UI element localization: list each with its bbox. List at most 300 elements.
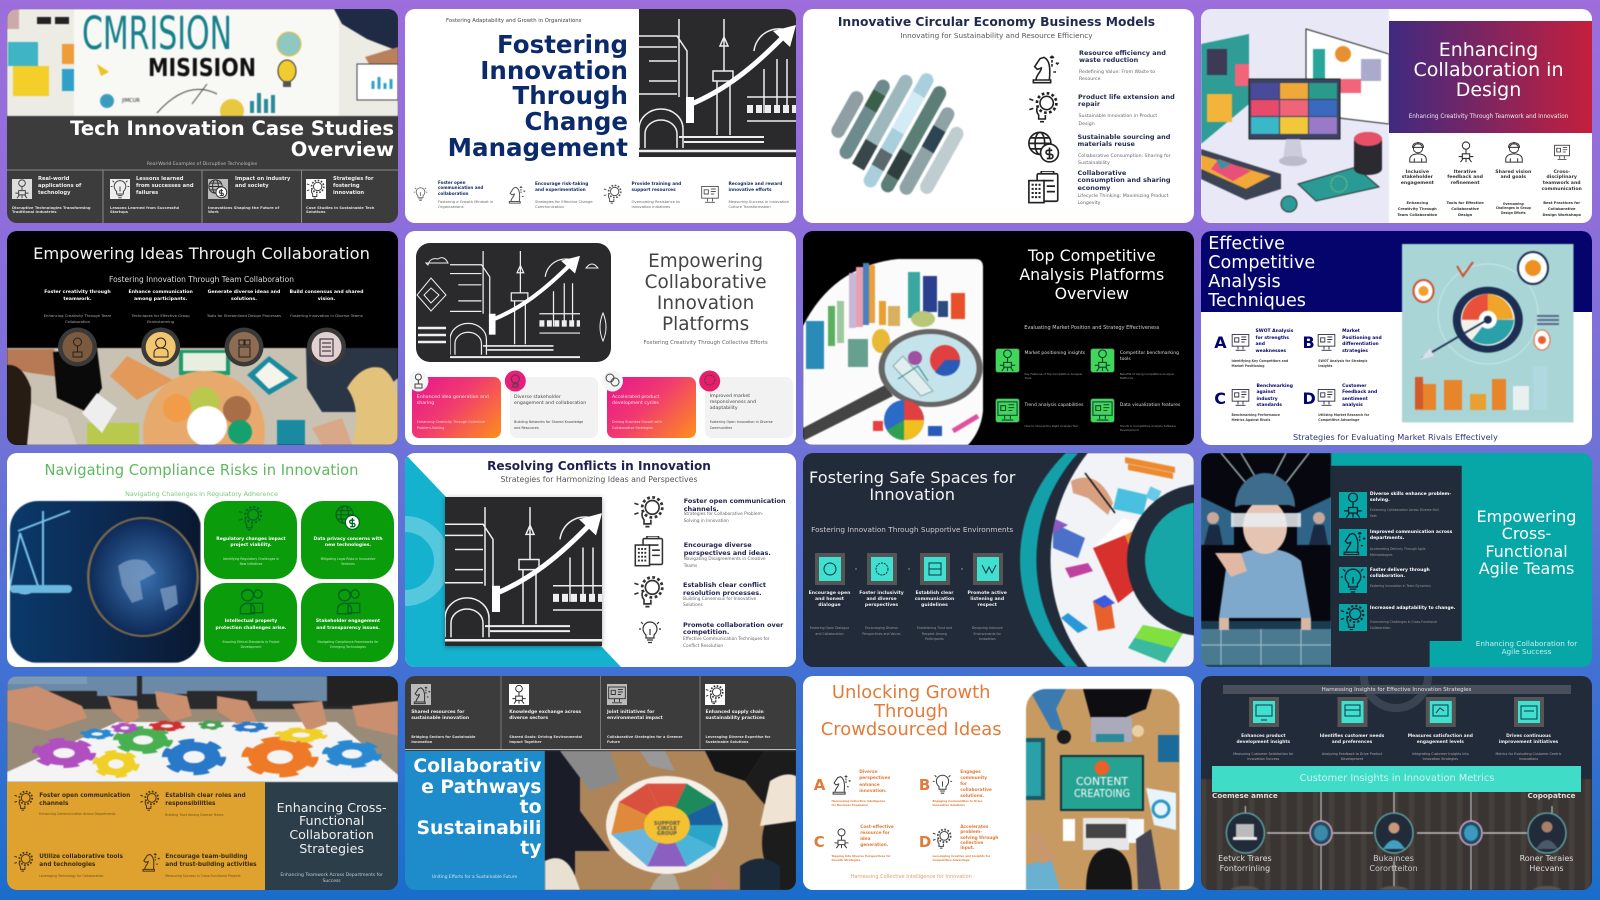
- title: Fostering Safe Spaces for: [809, 468, 1015, 487]
- item 2 note: Strategies for Effective Change: [535, 200, 593, 204]
- item 4 heading: fostering: [333, 182, 360, 188]
- subtitle: [280, 873, 383, 884]
- item 1: dialogue: [818, 603, 841, 608]
- item 1 heading: Inclusive: [1406, 170, 1429, 174]
- card C text: Accelerated product: [612, 394, 659, 400]
- item 2 note: [509, 734, 582, 744]
- item 4 text: [290, 290, 363, 303]
- item 4 note: Best Practices for: [1543, 201, 1580, 205]
- icon 2: [139, 790, 161, 811]
- subtitle: Navigating Challenges in Regulatory Adherence: [125, 490, 278, 498]
- item 2 heading: [1078, 92, 1175, 108]
- item A: innovation.: [859, 789, 887, 794]
- item 1: Diverse skills enhance problem-: [1370, 492, 1451, 497]
- image: line art with arrow: [639, 8, 796, 156]
- photo: support circle group: GROUP: [657, 831, 677, 837]
- item 4: Promote active: [968, 590, 1007, 596]
- item 3 note: Establishing Trust and: [917, 626, 952, 630]
- item 3 text: [208, 290, 280, 303]
- icon 2: [1090, 348, 1115, 373]
- item 2 heading: and experimentation: [535, 188, 586, 192]
- item 1 note: Solving in Innovation: [684, 519, 729, 524]
- item 1: Shared resources for: [411, 710, 464, 715]
- icon 3: [607, 684, 627, 705]
- node label right: Roner Teraies: [1520, 854, 1573, 863]
- item 3 note: [208, 206, 280, 214]
- title: Crowdsourced Ideas: [821, 719, 1002, 740]
- card 2 note: [321, 557, 375, 567]
- item 1 note: Strategies for Collaborative Problem-: [684, 512, 763, 517]
- photo: support circle group: CIRCLE: [657, 826, 677, 832]
- item 4: respect: [977, 603, 997, 608]
- title panel: [1388, 20, 1592, 132]
- item 2 note: [684, 556, 766, 571]
- item A note: Market Positioning: [1232, 364, 1264, 368]
- icon: bulb: [638, 616, 662, 648]
- item 2 heading: Product life extension and: [1078, 92, 1175, 100]
- panel: Top Competitive Analysis Platforms Overview: [802, 231, 1194, 445]
- item C text: standards: [1256, 403, 1282, 408]
- item 2 note: Lessons Learned from Successful: [110, 206, 179, 210]
- node label centre: Bukaınces: [1373, 854, 1414, 863]
- title: Through: [874, 701, 948, 722]
- item 2 note: Collaborative: [1451, 207, 1479, 211]
- item 1 note: Resource: [1079, 77, 1100, 82]
- card C text: [612, 394, 659, 408]
- item A: enhance: [859, 783, 880, 788]
- item 4 note: Innovation: [979, 637, 996, 641]
- item 1 note: [44, 313, 111, 324]
- item 3: guidelines: [921, 603, 948, 608]
- item 3: [607, 710, 663, 722]
- title: Design: [1456, 79, 1521, 101]
- item 4 note: Designing Inclusive: [972, 626, 1003, 630]
- panel: Empowering Ideas Through Collaboration: [7, 231, 398, 445]
- item 2: [1370, 530, 1452, 542]
- title: [809, 469, 1015, 503]
- item 1 heading: waste reduction: [1079, 56, 1138, 64]
- item 3: Establish clear: [916, 590, 954, 596]
- item 4 note: Innovations: [1519, 757, 1538, 761]
- item 3 note: Work: [208, 210, 219, 214]
- card B note: and Resources: [514, 426, 539, 430]
- item 2 heading: Encourage risk-taking: [535, 182, 588, 186]
- item 2 text: [128, 290, 193, 303]
- icon: globe and coin: [1028, 132, 1060, 163]
- card: stakeholder: [301, 583, 394, 662]
- item 4 heading: economy: [1078, 184, 1110, 192]
- item 3: communication: [915, 597, 954, 602]
- panel: Unlocking Growth Through Crowdsourced Ideas: [802, 676, 1194, 890]
- card 1 text: project viability.: [230, 543, 272, 548]
- item 2 heading: refinement: [1451, 181, 1480, 186]
- card C: [607, 377, 696, 438]
- item 4 note: Development: [1120, 428, 1139, 432]
- item 1 note: [411, 734, 475, 744]
- item 2 note: [1446, 201, 1484, 218]
- item 2 heading: [535, 182, 588, 192]
- node label left: [1218, 854, 1272, 874]
- item 4 note: [728, 200, 789, 209]
- blue title panel: [405, 751, 545, 890]
- item A note: Identifying Key Competitors and: [1232, 359, 1288, 363]
- item A note: Harnessing Collective Intelligence: [832, 799, 885, 803]
- item 1 heading: applications of: [38, 182, 81, 188]
- item 2: [509, 710, 581, 722]
- card 3 text: protection challenges arise.: [216, 626, 286, 630]
- item 1: sustainable innovation: [411, 716, 469, 721]
- subtitle: Fostering Adaptability and Growth in Organizations: [446, 18, 581, 24]
- subtitle: [1476, 640, 1577, 657]
- title: to: [520, 797, 542, 818]
- item 3: Establish clear conflict: [683, 581, 766, 589]
- item C: idea: [860, 837, 871, 842]
- item 2 heading: Iterative: [1454, 170, 1476, 174]
- icon 2: [1338, 529, 1366, 556]
- item 1 note: Measuring Customer Satisfaction for: [1233, 752, 1293, 756]
- card 4 text: [316, 619, 380, 632]
- band: [1212, 766, 1581, 792]
- icon: strategies: [306, 178, 326, 198]
- title: Collaboration: [289, 827, 374, 842]
- item 4 note: Collaborative: [1548, 207, 1576, 211]
- letter D: D: [1302, 389, 1316, 408]
- node label top left: Coemese amnce: [1212, 791, 1278, 800]
- icon: chess: [1032, 55, 1060, 84]
- item 2 note: Shared Goals: Driving Environmental: [509, 734, 582, 738]
- item 4: [706, 710, 765, 722]
- letter C: C: [1214, 389, 1226, 408]
- card 3 note: [222, 640, 280, 650]
- item 2 note: Accelerating Delivery Through Agile: [1370, 546, 1426, 550]
- item 2 note: Sustainable Innovation in Product: [1078, 114, 1157, 119]
- item 2 note: Communication: [535, 205, 564, 209]
- item 1 note: Fostering Open Dialogue: [810, 626, 849, 630]
- item 3 text: solutions.: [231, 297, 257, 302]
- item 4 note: [1078, 194, 1169, 206]
- item A note: for Business Expansion: [832, 803, 868, 807]
- item 2 note: Navigating Disagreements in Creative: [684, 557, 766, 562]
- item 3 note: Collaborative Strategies for a Greener: [607, 734, 683, 738]
- image: target with arrow: [1402, 244, 1574, 423]
- item A note: [832, 799, 885, 807]
- item 3 heading: Impact on industry: [235, 176, 290, 182]
- node label top right: Copopatnce: [1528, 791, 1575, 800]
- item 4: Encourage team-building: [165, 854, 248, 860]
- item 4 note: Case Studies in Sustainable Tech: [306, 206, 374, 210]
- item 1 note: Bridging Sectors for Sustainable: [411, 734, 475, 738]
- icon 3: [995, 398, 1020, 423]
- item 4 heading: innovation: [333, 190, 364, 196]
- card 2 text: Data privacy concerns with: [313, 537, 383, 542]
- icon: gear bulb: [1029, 92, 1058, 122]
- item 2 note: Perspectives and Voices: [862, 632, 901, 636]
- card A text: Enhanced idea generation and: [417, 394, 489, 400]
- card C text: development cycles: [612, 401, 659, 406]
- item 4 heading: consumption and sharing: [1078, 176, 1171, 184]
- item B: solutions.: [960, 794, 984, 799]
- item D text: sentiment: [1342, 396, 1368, 402]
- icon: tower: [1454, 140, 1476, 164]
- item 3: environmental impact: [607, 716, 663, 721]
- title: [1477, 508, 1576, 577]
- item 2 heading: feedback and: [1447, 175, 1483, 180]
- node label left: Fontorrinling: [1220, 864, 1270, 873]
- item 3 note: Challenges in Group: [1496, 206, 1531, 210]
- band label: Customer Insights in Innovation Metrics: [1300, 773, 1494, 784]
- title: Unlocking Growth: [832, 682, 991, 703]
- title: Empowering: [1477, 507, 1576, 526]
- item 4 note: Sustainable Solutions: [706, 740, 748, 744]
- item C note: Metrics Against Rivals: [1232, 418, 1270, 422]
- item 3: and technologies: [39, 862, 95, 868]
- item 1: [411, 710, 469, 722]
- item 4: listening and: [970, 597, 1004, 602]
- icon: gear: [604, 184, 622, 204]
- item 4: Increased adaptability to change.: [1370, 606, 1455, 611]
- item 2 note: Encouraging Diverse: [865, 626, 898, 630]
- item 1 note: [1024, 372, 1082, 380]
- item 3 heading: Sustainable sourcing and: [1078, 132, 1170, 140]
- card 2 note: Ventures: [341, 562, 355, 566]
- item 2 note: Brainstorming: [147, 319, 174, 324]
- item 1 note: Enhancing Creativity Through Team: [44, 313, 111, 318]
- item 1 heading: Foster open: [438, 180, 466, 184]
- title: Management: [448, 133, 628, 162]
- item 1 note: Fostering a Growth Mindset in: [438, 200, 493, 204]
- item 4: [1499, 734, 1558, 747]
- photo: support circle group: [545, 751, 796, 890]
- card A note: Enhancing Creativity Through Collective: [417, 420, 485, 424]
- item 2: Improved communication across: [1370, 530, 1452, 535]
- item 2 note: Methodologies: [1370, 552, 1392, 556]
- image: charts and magnifier: [802, 231, 984, 445]
- item 1 note: Innovation: [411, 740, 432, 744]
- icon 3: [13, 851, 35, 872]
- item 2 note: Analyzing Feedback to Drive Product: [1322, 752, 1382, 756]
- item 1: Market positioning insights: [1024, 351, 1085, 356]
- item D note: [932, 854, 990, 862]
- item 1 text: teamwork.: [63, 297, 92, 302]
- item 1 heading: Resource efficiency and: [1079, 48, 1166, 56]
- item 4: improvement initiatives: [1499, 740, 1558, 745]
- image: scales and globe lens: [10, 501, 200, 663]
- icon C: [1228, 387, 1252, 407]
- subtitle: Fostering Creativity Through Collective Efforts: [643, 340, 768, 346]
- item 4 note: Trends in Competitive Analysis Software: [1120, 424, 1176, 428]
- photo: mission desk: MISISION: [148, 52, 256, 82]
- title: Resolving Conflicts in Innovation: [487, 459, 711, 473]
- top dividers: [405, 676, 796, 750]
- item 3 note: Innovation Initiatives: [632, 205, 670, 209]
- item 4: Promote collaboration over: [683, 620, 783, 628]
- item 1 note: Organizations: [438, 205, 464, 209]
- item 2: diverse sectors: [509, 716, 548, 721]
- item C: resource for: [860, 831, 890, 836]
- icon: engineer: [1409, 142, 1427, 163]
- item B note: [1318, 359, 1367, 369]
- title: Sustainabili: [417, 818, 542, 839]
- item 1: Encourage open: [809, 590, 850, 596]
- panel: Resolving Conflicts in Innovation: [405, 453, 796, 667]
- title: [413, 757, 542, 860]
- item 3 note: [1496, 202, 1531, 216]
- item 3: [39, 853, 123, 869]
- item 4 heading: [1541, 170, 1582, 193]
- item 2: and preferences: [1332, 740, 1372, 745]
- card 4 note: Navigating Compliance Frameworks for: [318, 640, 378, 644]
- item D: Accelerates: [960, 825, 988, 830]
- item 4 note: Longevity: [1078, 201, 1100, 206]
- item 1 note: Disruptive Technologies Transforming: [12, 206, 91, 210]
- photo: hands and gears: [7, 676, 398, 782]
- item 4 note: Fostering Innovation in Diverse Teams: [290, 313, 363, 318]
- teal background shape: [405, 453, 796, 667]
- card 1 note: Identifying Regulatory Challenges in: [223, 557, 279, 561]
- item 3 heading: and goals: [1500, 175, 1526, 180]
- item 4 note: [972, 626, 1003, 643]
- item 3 heading: Shared vision: [1495, 170, 1531, 174]
- icon: gears: [633, 575, 666, 608]
- item A text: SWOT Analysis: [1256, 329, 1293, 334]
- item 4 heading: [1078, 168, 1171, 192]
- card C note: Collaborative Strategies: [612, 426, 653, 430]
- item 4 text: Build consensus and shared: [290, 290, 363, 295]
- icon D: [932, 828, 952, 849]
- item 1 note: [1370, 507, 1439, 520]
- panel: Enhancing Collaboration in Design: [1200, 8, 1592, 222]
- title: Change: [524, 107, 628, 136]
- image: curved rings with design objects: [1019, 453, 1194, 667]
- icon B: [1314, 332, 1338, 352]
- item D: problem-: [960, 830, 982, 835]
- item 2: [165, 792, 246, 808]
- icon 2: [509, 684, 529, 705]
- item 4: [165, 853, 257, 869]
- letter D: D: [919, 833, 931, 851]
- card 3 text: [216, 619, 286, 632]
- title: Functional: [299, 813, 364, 828]
- item 2: [859, 590, 904, 609]
- card 1 text: [216, 537, 286, 550]
- item 1 heading: [1079, 48, 1166, 64]
- item B note: Innovative Solutions: [932, 803, 965, 807]
- item B note: SWOT Analysis for Strategic: [1318, 359, 1367, 363]
- item 4 note: Culture Transformation: [728, 205, 771, 209]
- item 2: departments.: [1370, 536, 1404, 541]
- subtitle: Fostering Innovation Through Team Collaboration: [109, 275, 294, 284]
- card D text: responsiveness and: [710, 400, 756, 405]
- item 2 note: Tools for Effective: [1446, 201, 1484, 205]
- item 3: collaboration.: [1370, 574, 1405, 579]
- item 3 note: [917, 626, 952, 643]
- item B: community: [960, 776, 987, 781]
- card D text: [710, 394, 756, 412]
- item 4 heading: [728, 182, 782, 192]
- header strip: [1222, 685, 1570, 694]
- item 2 note: Design: [1458, 213, 1472, 217]
- title: [448, 30, 628, 162]
- icon: presentation: [701, 186, 719, 203]
- item 1 note: Team Collaboration: [1397, 213, 1437, 217]
- item 1: channels: [39, 801, 68, 807]
- item A: perspectives: [859, 776, 890, 781]
- card A: [412, 377, 501, 438]
- item 3 note: Overcoming Resistance to: [632, 200, 680, 204]
- item 3 heading: [235, 176, 290, 188]
- item B note: [932, 799, 982, 807]
- item 3 heading: and society: [235, 182, 269, 188]
- item 1 heading: [438, 180, 483, 196]
- panel: Innovative Circular Economy Business Models: [802, 8, 1194, 222]
- item 2 note: Teams: [684, 564, 697, 569]
- item B text: Market: [1342, 329, 1360, 334]
- card B note: [514, 420, 583, 431]
- subtitle: Real-World Examples of Disruptive Technologies: [147, 162, 257, 167]
- item 3 note: Design Efforts: [1501, 211, 1526, 215]
- item 2: perspectives and ideas.: [684, 549, 771, 557]
- icon: lessons: [110, 178, 130, 198]
- icon: bulb: [414, 187, 428, 201]
- item 1 heading: [1401, 170, 1434, 187]
- icon A: [829, 773, 852, 795]
- photo: content creation table: CONTENT: [1076, 775, 1128, 788]
- item 4: Drives continuous: [1506, 734, 1551, 739]
- icon: workshop: [1552, 142, 1570, 162]
- photo: support circle group: SUPPORT: [654, 821, 681, 827]
- item 3 note: Leveraging Technology for Collaboration: [39, 874, 104, 878]
- title: Cross-: [1502, 524, 1551, 543]
- item 1: Foster open communication: [39, 793, 130, 799]
- decorative backdrop ring: [1330, 676, 1460, 716]
- item D: collective: [960, 841, 983, 846]
- node label left: Eetvck Trares: [1218, 854, 1272, 863]
- node label right: [1520, 854, 1573, 874]
- subtitle: Innovating for Sustainability and Resource Efficiency: [900, 30, 1093, 40]
- item 3: [915, 590, 954, 609]
- title: Tech Innovation Case Studies: [70, 117, 394, 140]
- icon 4: [1090, 398, 1115, 423]
- item 1 heading: engagement: [1401, 181, 1434, 186]
- title: [70, 117, 394, 161]
- item B text: strategies: [1342, 349, 1368, 354]
- panel: Enhancing Cross-Functional Collaboration Strategies: [7, 676, 398, 890]
- image: woman with visor: [1200, 453, 1330, 667]
- card 3 note: Development: [241, 645, 261, 649]
- item 3 heading: Provide training and: [632, 182, 681, 186]
- subtitle: Evaluating Market Position and Strategy Effectiveness: [1024, 325, 1159, 331]
- item 3 note: Overcoming: [1503, 202, 1524, 206]
- item 2 note: Development: [1341, 757, 1363, 761]
- card 4 note: [318, 640, 378, 650]
- item 3 note: [1078, 154, 1171, 166]
- title: e Pathways: [421, 777, 542, 798]
- title: Empowering Ideas Through Collaboration: [33, 244, 370, 263]
- title: Collaborativ: [413, 756, 542, 777]
- item 3 text: Generate diverse ideas and: [208, 290, 280, 295]
- title: [1208, 234, 1315, 310]
- footer: Strategies for Evaluating Market Rivals Effectively: [1293, 432, 1498, 442]
- item 2: [1120, 351, 1179, 363]
- item D note: Leveraging Creative and Insights for: [932, 854, 990, 858]
- item 2: [1320, 734, 1384, 747]
- title: Innovative Circular Economy Business Models: [838, 14, 1155, 28]
- item 1: channels.: [684, 505, 719, 513]
- item 2: Encourage diverse: [684, 541, 752, 549]
- item 4 note: Measuring Success in Cross-Functional Projects: [165, 874, 241, 878]
- item 4 note: Environments for: [973, 632, 1001, 636]
- illustration: video collaboration: [1201, 9, 1389, 223]
